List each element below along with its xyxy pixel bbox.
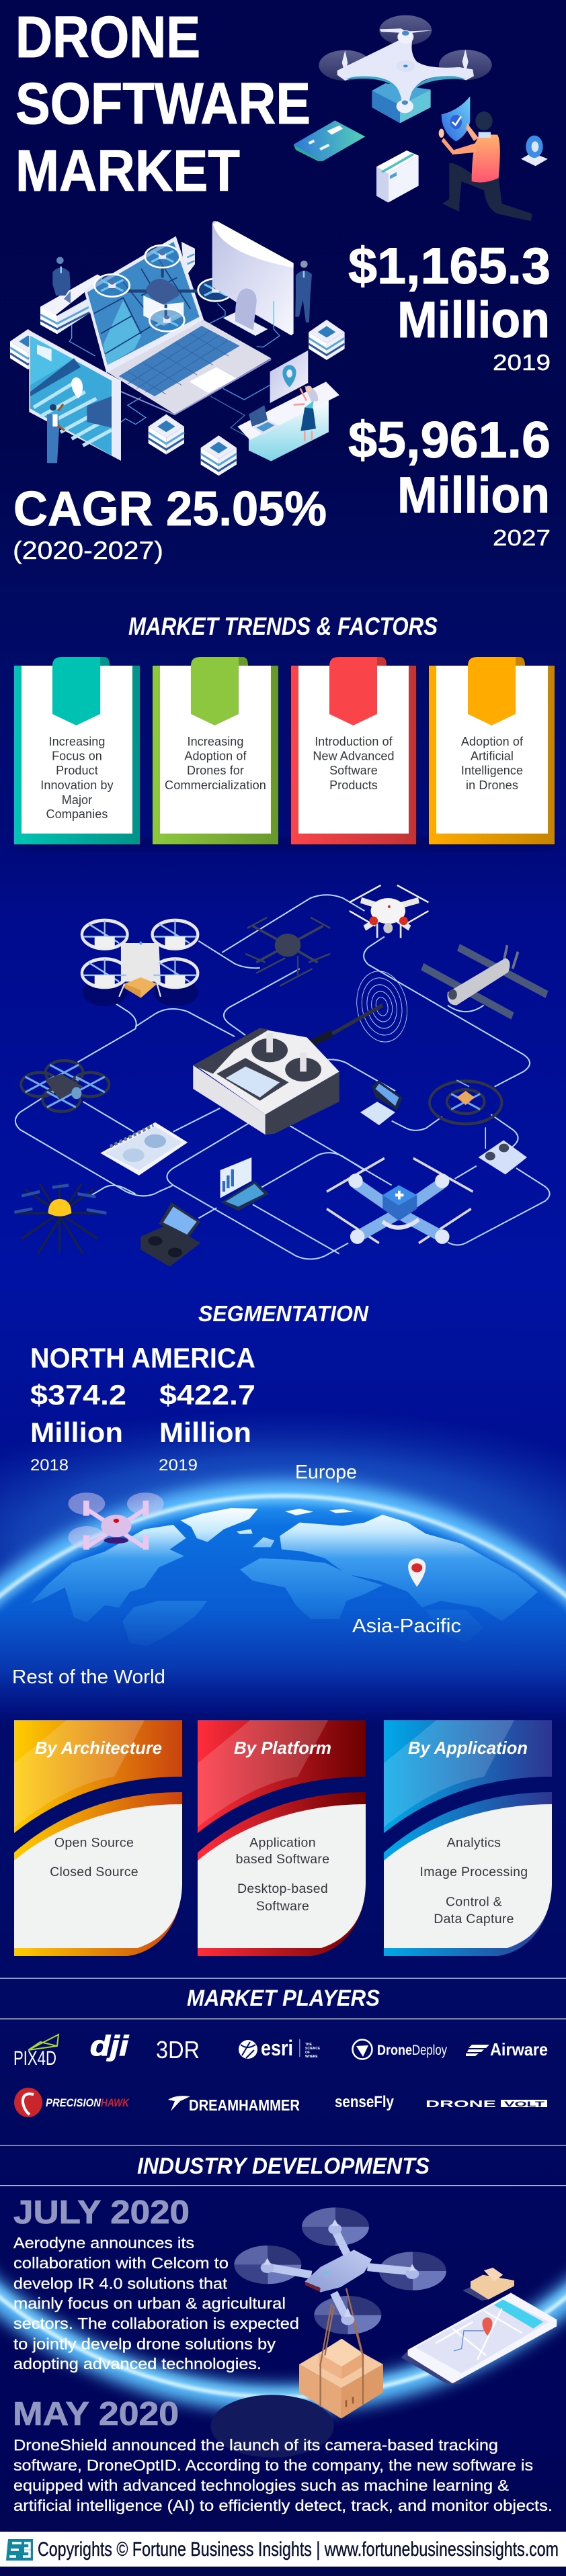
illustration: delivery drone with phone — [210, 2207, 557, 2458]
text block: North America: Million — [30, 1417, 123, 1448]
icon: drone over globe — [68, 1493, 164, 1550]
text block: July 2020: collaboration with Celcom to — [13, 2254, 229, 2272]
card: commercialization — [153, 657, 278, 844]
logo: Esri: SCIENCE — [305, 2047, 321, 2051]
world map — [31, 1508, 538, 1646]
panel: by architecture: Closed Source — [50, 1865, 138, 1879]
panel: by platform: based Software — [236, 1852, 329, 1867]
connection lines — [69, 301, 280, 437]
title: DRONE — [15, 5, 200, 70]
heading: market players: MARKET PLAYERS — [187, 1986, 380, 2011]
icon: yellow multirotor — [14, 1183, 106, 1254]
woman — [294, 386, 318, 441]
logo: Esri — [239, 2036, 321, 2060]
text block: July 2020: develop IR 4.0 solutions that — [13, 2274, 227, 2292]
card: artificial intelligence: Adoption of — [461, 735, 524, 748]
text block: May 2020: MAY 2020 — [13, 2396, 179, 2432]
back desk — [40, 242, 195, 334]
card: product innovation: Major — [62, 793, 92, 807]
icon: main remote controller — [193, 1006, 382, 1135]
icon: small parcels — [462, 2268, 514, 2301]
logo: DroneDeploy: Drone — [377, 2043, 412, 2058]
laptop — [84, 236, 271, 414]
icon: tablet — [100, 1122, 188, 1175]
icon: delivery quadcopter — [82, 920, 198, 1006]
card: product innovation: Focus on — [52, 750, 102, 763]
text block: May 2020 — [13, 2396, 553, 2514]
icon: footer logo — [6, 2539, 33, 2561]
logo: DJI: dji — [90, 2030, 130, 2061]
card: new software products: Introduction of — [315, 735, 393, 748]
text block: July 2020: adopting advanced technologies. — [13, 2355, 261, 2372]
left screen panel — [29, 330, 121, 461]
icon: chart and phone — [220, 1157, 269, 1211]
logos: market players — [13, 2030, 548, 2117]
text block: May 2020: DroneShield announced the launch of its camera-based tracking — [13, 2436, 498, 2454]
card: new software products: Software — [329, 764, 378, 777]
text block: July 2020: sectors. The collaboration is expected — [13, 2315, 299, 2332]
value 2019: $1,165.3 — [348, 238, 551, 295]
illustration: globe — [0, 1411, 566, 2399]
text block: July 2020: JULY 2020 — [13, 2194, 190, 2231]
logo: 3DR: 3DR — [156, 2036, 200, 2063]
icon: blue quadcopter — [327, 1158, 473, 1244]
icon: quadcopter — [319, 15, 492, 113]
card: commercialization: Drones for — [187, 764, 244, 777]
label: Europe: Europe — [295, 1462, 357, 1483]
text block: July 2020 — [13, 2194, 299, 2372]
value 2019 — [348, 238, 551, 375]
icon: white camera drone — [350, 885, 428, 938]
card: artificial intelligence — [429, 657, 555, 844]
card: artificial intelligence: Intelligence — [461, 764, 523, 777]
connection lines — [15, 895, 550, 1259]
logo: Esri: OF — [305, 2051, 310, 2055]
panel: by platform: By Platform — [234, 1738, 331, 1758]
text block: July 2020: Aerodyne announces its — [13, 2234, 194, 2252]
icon: pin on globe — [408, 1558, 426, 1587]
title: MARKET — [15, 138, 240, 204]
heading: industry developments: INDUSTRY DEVELOPMENTS — [137, 2153, 430, 2179]
card: artificial intelligence: Artificial — [471, 750, 514, 763]
panel: by application: Data Capture — [434, 1912, 514, 1926]
card: new software products: New Advanced — [313, 750, 395, 763]
logo: senseFly: senseFly — [335, 2093, 395, 2111]
panel: by architecture: Open Source — [54, 1835, 134, 1850]
man left — [52, 257, 71, 296]
CAGR — [13, 482, 327, 564]
panel: by application: Control & — [446, 1894, 502, 1909]
panel: by platform: Application — [249, 1835, 316, 1850]
panel: trend cards — [14, 657, 555, 849]
icon: envelope — [294, 120, 365, 161]
icon: hanging package — [372, 83, 431, 123]
icon: white controller — [479, 1127, 527, 1175]
value 2019: Million — [397, 292, 550, 349]
icon: dark quadcopter — [245, 918, 330, 986]
value 2027: 2027 — [493, 525, 551, 550]
label: Rest of the World: Rest of the World — [12, 1667, 165, 1688]
text block: North America: Million — [159, 1417, 251, 1448]
icon: person holding shield — [439, 96, 532, 221]
panel: by application: Image Processing — [420, 1865, 528, 1879]
panel: by architecture — [14, 1720, 182, 1956]
card: new software products: Products — [329, 779, 378, 792]
chart: drone network diagram — [14, 885, 550, 1267]
monitor — [212, 221, 294, 336]
logo: DroneDeploy — [352, 2039, 447, 2059]
logo: Esri: THE — [305, 2043, 313, 2047]
man right — [295, 261, 312, 322]
panel: by application: By Application — [408, 1738, 528, 1758]
text block: North America: $374.2 — [30, 1379, 126, 1411]
card: commercialization: Adoption of — [184, 750, 247, 763]
value 2027: Million — [397, 467, 550, 524]
text block: North America: $422.7 — [159, 1379, 255, 1411]
logo: Drone Volt — [426, 2098, 547, 2110]
icon: left dark drone — [21, 1061, 109, 1112]
illustration: delivery drone and person with shield — [294, 15, 548, 221]
panel: by application: Analytics — [447, 1835, 501, 1850]
card: artificial intelligence: in Drones — [466, 779, 518, 792]
icon: drone rotors and body — [234, 2207, 446, 2407]
illustration: laptop operations scene — [10, 221, 345, 476]
logo: PrecisionHawk: PRECISION — [46, 2096, 102, 2109]
logo: Drone Volt: DRONE — [426, 2098, 496, 2110]
icon: cardboard box — [299, 2339, 383, 2419]
logo: PrecisionHawk — [14, 2088, 130, 2117]
panel: by architecture: By Architecture — [35, 1738, 162, 1758]
text block: North America: 2019 — [159, 1456, 198, 1474]
card: new software products — [291, 657, 416, 844]
panel: by application — [384, 1720, 552, 1956]
text block: July 2020: mainly focus on urban & agricultural — [13, 2295, 286, 2312]
title: SOFTWARE — [15, 71, 311, 136]
server stacks — [10, 320, 345, 476]
value 2019: 2019 — [493, 350, 551, 375]
value 2027 — [348, 412, 551, 550]
icon: fixed-wing drone — [422, 945, 547, 1016]
text block: May 2020: software, DroneOptID. According to the company, the new software is — [13, 2456, 533, 2474]
logo: Airware: Airware — [490, 2039, 548, 2059]
text block: North America: NORTH AMERICA — [30, 1342, 255, 1374]
card: product innovation: Increasing — [48, 735, 106, 748]
drone on screen — [95, 245, 233, 331]
icon: round-frame drone — [430, 1080, 501, 1124]
label: Asia-Pacific: Asia-Pacific — [352, 1615, 461, 1637]
panel: by platform: Software — [256, 1899, 309, 1914]
text block: May 2020: artificial intelligence (AI) to efficiently detect, track, and monitor objects. — [13, 2497, 553, 2514]
title — [15, 5, 311, 204]
person at panel — [47, 404, 65, 463]
card: commercialization: Commercialization — [165, 779, 266, 792]
panel: by platform: Desktop-based — [237, 1881, 328, 1896]
text block: July 2020: to jointly develp drone solutions by — [13, 2335, 276, 2352]
icon: parcel box — [376, 150, 419, 203]
card: product innovation: Companies — [46, 807, 108, 821]
reception counter — [237, 351, 339, 461]
logo: Dreamhammer: DREAMHAMMER — [189, 2096, 300, 2114]
value 2027: $5,961.6 — [348, 412, 551, 469]
CAGR: CAGR 25.05% — [13, 482, 327, 536]
logo: Pix4D: PIX4D — [13, 2047, 56, 2070]
text block: May 2020: equipped with advanced technologies such as machine learning & — [13, 2477, 509, 2494]
icon: phone controller — [360, 1080, 403, 1125]
logo: Drone Volt: VOLT — [504, 2100, 545, 2108]
heading: segmentation: SEGMENTATION — [198, 1301, 369, 1326]
card: product innovation: Innovation by — [40, 779, 114, 792]
logo: PrecisionHawk: HAWK — [101, 2096, 130, 2109]
logo: Esri: WHERE — [305, 2055, 318, 2059]
panel: by platform — [198, 1720, 366, 1956]
text block: North America: 2018 — [30, 1456, 69, 1474]
logo: Airware — [466, 2039, 548, 2059]
footer — [0, 2532, 566, 2567]
logo: DroneDeploy: Deploy — [412, 2043, 447, 2058]
icon: location pin — [521, 136, 548, 166]
text block: North America — [30, 1342, 255, 1474]
card: product innovation — [14, 657, 140, 844]
logo: Pix4D — [13, 2035, 58, 2070]
icon: black controller with screen — [140, 1202, 200, 1267]
heading: market trends: MARKET TRENDS & FACTORS — [128, 613, 438, 640]
icon: signal waves — [349, 963, 415, 1050]
card: product innovation: Product — [56, 764, 98, 777]
logo: Esri: esri — [261, 2036, 293, 2060]
icon: phone map — [401, 2293, 557, 2385]
card: commercialization: Increasing — [187, 735, 244, 748]
CAGR: (2020-2027) — [13, 537, 163, 564]
